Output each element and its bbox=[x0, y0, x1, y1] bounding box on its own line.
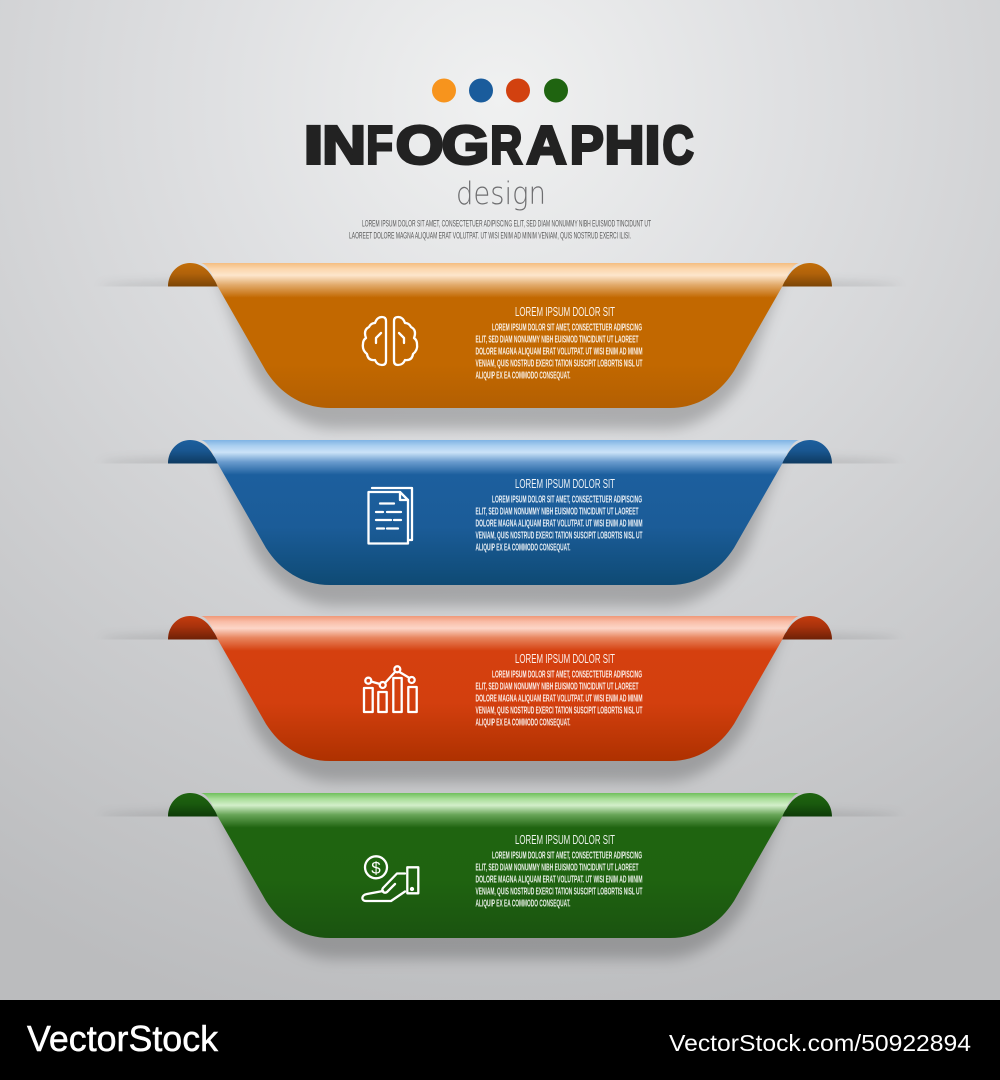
text block: red: LOREM IPSUM DOLOR SIT bbox=[515, 651, 615, 666]
text block: blue bbox=[476, 476, 643, 554]
text: LOREM IPSUM DOLOR SIT AMET, CONSECTETUER ADIPISCING bbox=[492, 322, 642, 334]
text block: red: ALIQUIP EX EA COMMODO CONSEQUAT. bbox=[476, 716, 571, 728]
icon: documents bbox=[368, 488, 412, 544]
title: G bbox=[442, 116, 489, 176]
intro text bbox=[349, 218, 651, 242]
text block: blue: LOREM IPSUM DOLOR SIT bbox=[515, 476, 615, 491]
text block: green: LOREM IPSUM DOLOR SIT bbox=[515, 832, 615, 847]
title: F bbox=[366, 116, 393, 176]
text block: orange: ALIQUIP EX EA COMMODO CONSEQUAT. bbox=[476, 370, 571, 382]
text: LOREM IPSUM DOLOR SIT AMET, CONSECTETUER ADIPISCING bbox=[492, 494, 642, 506]
intro text: LOREM IPSUM DOLOR SIT AMET, CONSECTETUER ADIPISCING ELIT, SED DIAM NONUMMY NIBH EUISMOD TINCIDUNT UT bbox=[362, 218, 651, 230]
title: R bbox=[490, 116, 522, 176]
title: A bbox=[526, 116, 566, 176]
footer bar: VectorStock bbox=[27, 1018, 219, 1059]
footer bar: VectorStock.com/50922894 bbox=[669, 1030, 971, 1056]
icon: brain bbox=[363, 317, 417, 365]
text block: blue: ALIQUIP EX EA COMMODO CONSEQUAT. bbox=[476, 542, 571, 554]
text: VENIAM, QUIS NOSTRUD EXERCI TATION SUSCIPIT LOBORTIS NISL UT bbox=[476, 886, 643, 898]
text block: green: ALIQUIP EX EA COMMODO CONSEQUAT. bbox=[476, 898, 571, 910]
text: VENIAM, QUIS NOSTRUD EXERCI TATION SUSCIPIT LOBORTIS NISL UT bbox=[476, 704, 643, 716]
subtitle: design bbox=[456, 176, 546, 212]
text block: orange: LOREM IPSUM DOLOR SIT bbox=[515, 304, 615, 319]
text: DOLORE MAGNA ALIQUAM ERAT VOLUTPAT. UT WISI ENIM AD MINIM bbox=[476, 874, 643, 886]
icon: bar chart bbox=[364, 666, 417, 712]
title: C bbox=[662, 116, 694, 176]
text: DOLORE MAGNA ALIQUAM ERAT VOLUTPAT. UT WISI ENIM AD MINIM bbox=[476, 346, 643, 358]
text: ELIT, SED DIAM NONUMMY NIBH EUISMOD TINCIDUNT UT LAOREET bbox=[476, 680, 639, 692]
colour dots bbox=[432, 78, 568, 102]
text block: orange bbox=[476, 304, 643, 382]
title bbox=[304, 116, 694, 176]
title: O bbox=[396, 116, 444, 176]
panel: green banner bbox=[100, 793, 900, 959]
panel: red banner bbox=[100, 616, 900, 782]
text: ELIT, SED DIAM NONUMMY NIBH EUISMOD TINCIDUNT UT LAOREET bbox=[476, 862, 639, 874]
icon: hand with coin bbox=[362, 856, 418, 901]
text block: green bbox=[476, 832, 643, 910]
text block: red bbox=[476, 651, 643, 728]
text: ELIT, SED DIAM NONUMMY NIBH EUISMOD TINCIDUNT UT LAOREET bbox=[476, 334, 639, 346]
title: P bbox=[570, 116, 604, 176]
text: DOLORE MAGNA ALIQUAM ERAT VOLUTPAT. UT WISI ENIM AD MINIM bbox=[476, 692, 643, 704]
text: VENIAM, QUIS NOSTRUD EXERCI TATION SUSCIPIT LOBORTIS NISL UT bbox=[476, 530, 643, 542]
text: VENIAM, QUIS NOSTRUD EXERCI TATION SUSCIPIT LOBORTIS NISL UT bbox=[476, 358, 643, 370]
panel: orange banner bbox=[100, 263, 900, 429]
text: ELIT, SED DIAM NONUMMY NIBH EUISMOD TINCIDUNT UT LAOREET bbox=[476, 506, 639, 518]
footer bar bbox=[0, 1000, 1000, 1080]
panel: blue banner bbox=[100, 440, 900, 606]
intro text: LAOREET DOLORE MAGNA ALIQUAM ERAT VOLUTPAT. UT WISI ENIM AD MINIM VENIAM, QUIS NOSTRUD EXERCI ILISI. bbox=[349, 230, 631, 242]
title: H bbox=[605, 116, 644, 176]
text: LOREM IPSUM DOLOR SIT AMET, CONSECTETUER ADIPISCING bbox=[492, 668, 642, 680]
icon: hand with coin: $ bbox=[371, 858, 381, 878]
title: I bbox=[645, 116, 660, 176]
text: LOREM IPSUM DOLOR SIT AMET, CONSECTETUER ADIPISCING bbox=[492, 850, 642, 862]
text: DOLORE MAGNA ALIQUAM ERAT VOLUTPAT. UT WISI ENIM AD MINIM bbox=[476, 518, 643, 530]
title: N bbox=[322, 116, 366, 176]
title: I bbox=[304, 116, 323, 176]
